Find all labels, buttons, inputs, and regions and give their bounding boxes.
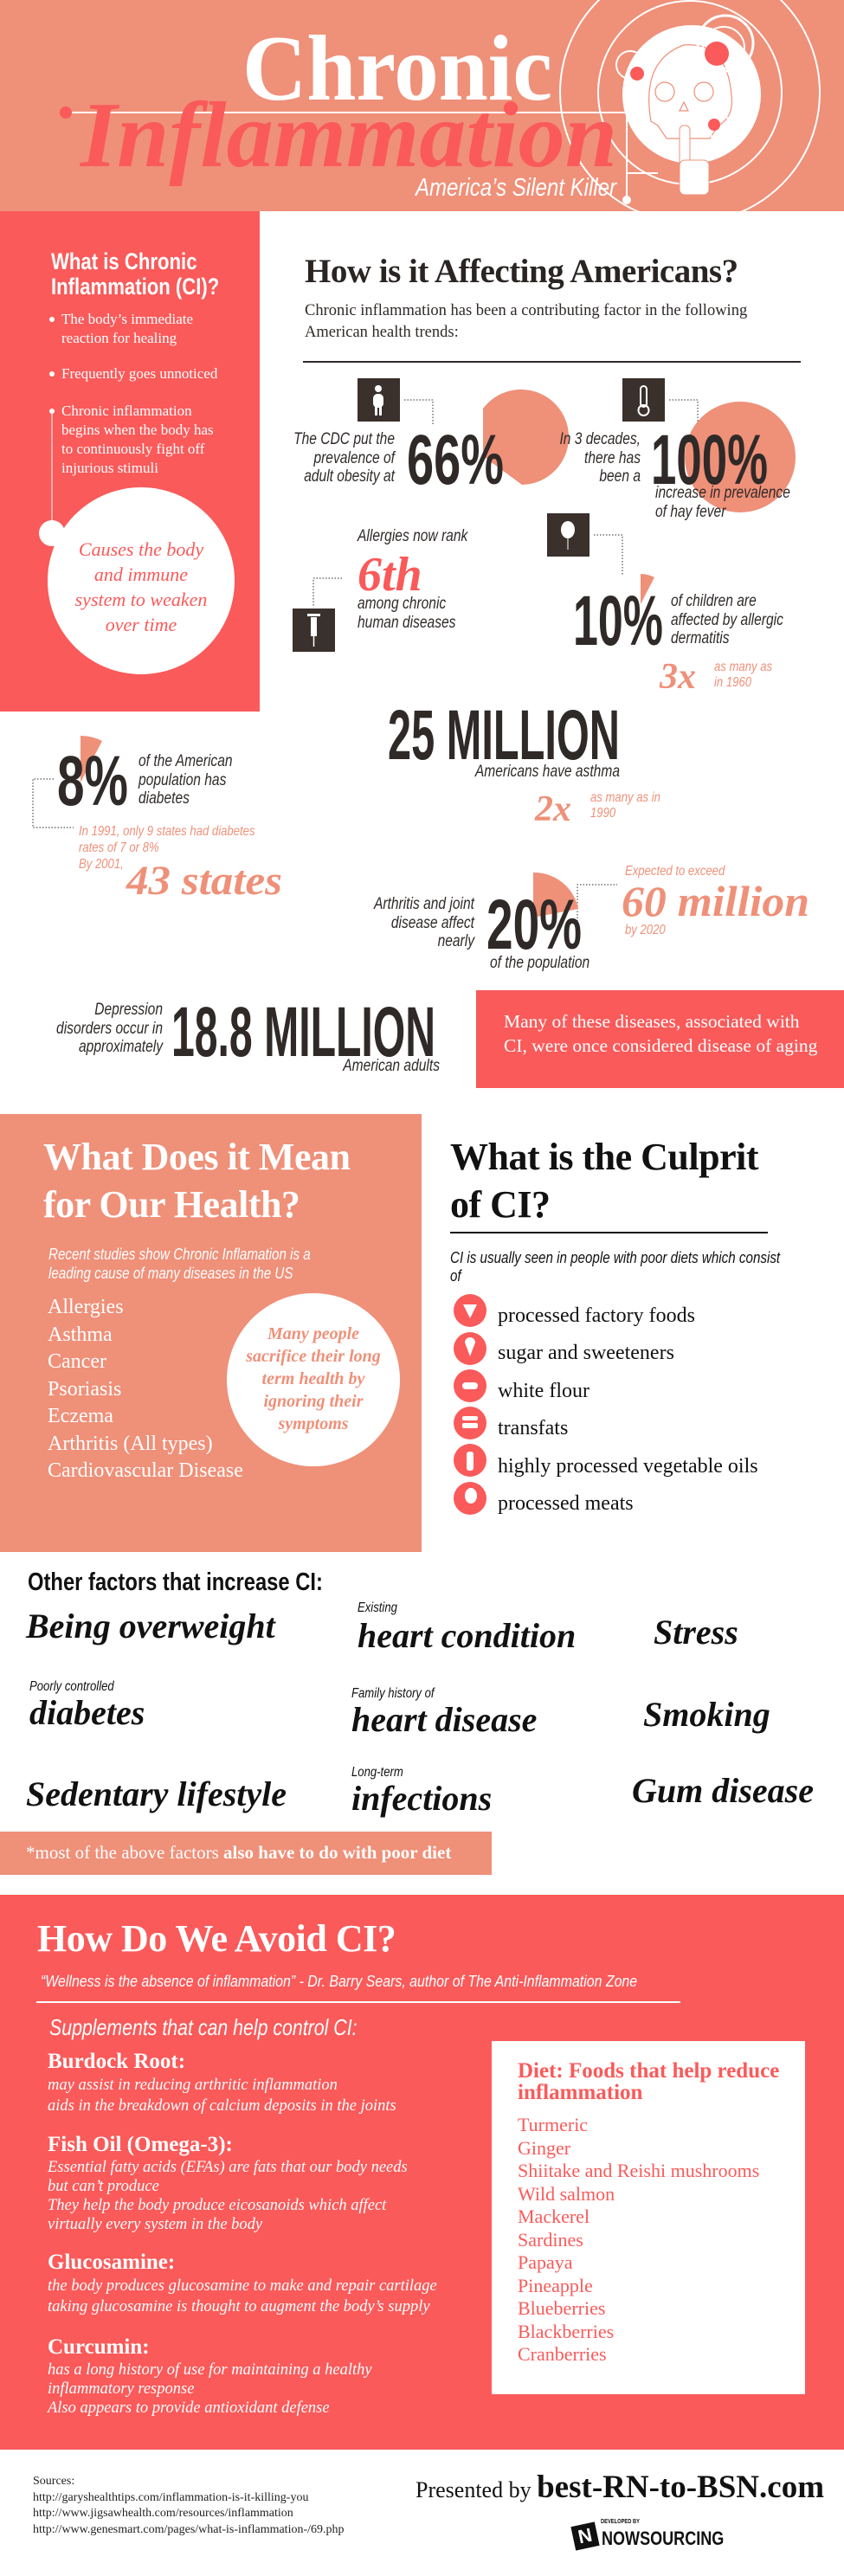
supplements list: but can’t produce	[48, 2178, 159, 2195]
sources: http://www.genesmart.com/pages/what-is-inflammation-/69.php	[33, 2522, 345, 2536]
title: Chronic	[242, 17, 552, 120]
text: approximately	[79, 1038, 163, 1056]
text: of hay fever	[655, 502, 725, 521]
diet box: Shiitake and Reishi mushrooms	[518, 2160, 759, 2181]
heading: of CI?	[450, 1183, 551, 1226]
culprit list	[454, 1294, 758, 1515]
supplements heading: Supplements that can help control CI:	[49, 2014, 358, 2040]
stat: asthma: 25 MILLION	[388, 696, 620, 775]
stat: arthritis 20%: 60 million	[622, 877, 809, 925]
text: disorders occur in	[56, 1020, 163, 1037]
logo: nowsourcing: DEVELOPED BY	[601, 2519, 640, 2525]
stat: arthritis 20%: 20%	[486, 886, 582, 964]
diet box: Cranberries	[518, 2343, 607, 2365]
sources: Sources:	[33, 2475, 74, 2488]
supplements list: taking glucosamine is thought to augment the body’s supply	[48, 2298, 430, 2315]
stat labels: prevalence of	[313, 448, 395, 467]
culprit list: processed meats	[498, 1492, 634, 1515]
text: CI is usually seen in people with poor diets which consist	[450, 1248, 780, 1266]
sources: http://www.jigsawhealth.com/resources/inflammation	[33, 2507, 293, 2520]
disease list: Arthritis (All types)	[48, 1432, 213, 1454]
stat: asthma: 2x	[534, 789, 571, 829]
stat labels	[293, 430, 396, 486]
title: America’s Silent Killer	[414, 174, 617, 202]
diet box: inflammation	[518, 2081, 642, 2104]
callout: over time	[106, 614, 177, 635]
heading: affecting americans: How is it Affecting Americans?	[305, 253, 738, 290]
logo: nowsourcing: NOWSOURCING	[602, 2528, 724, 2549]
callout circle: ignoring their	[263, 1392, 364, 1411]
stat labels: The CDC put the	[293, 430, 395, 448]
callout circle	[227, 1293, 400, 1466]
header	[0, 0, 844, 211]
factors grid: Long-term	[351, 1765, 403, 1780]
diet box: Ginger	[518, 2136, 570, 2159]
text: nearly	[438, 932, 474, 950]
supplements list	[47, 2050, 437, 2417]
logo: nowsourcing	[570, 2519, 724, 2551]
text: rates of 7 or 8%	[79, 840, 159, 855]
factors grid: diabetes	[29, 1693, 145, 1732]
stats chart area	[33, 378, 809, 1072]
text: of children are	[671, 592, 757, 610]
bullets: Frequently goes unnoticed	[61, 365, 217, 382]
text: Allergies now rank	[358, 527, 467, 545]
title: Inflammation	[79, 84, 617, 187]
stat: hay fever 100%: 100%	[651, 421, 768, 499]
stat: dermatitis 10%: 3x	[659, 657, 696, 697]
disease list: Cancer	[48, 1350, 106, 1373]
heading: other factors: Other factors that increase CI:	[28, 1568, 323, 1596]
text: dermatitis	[671, 629, 730, 647]
sources: http://garyshealthtips.com/inflammation-is-it-killing-you	[33, 2491, 308, 2503]
text: diabetes	[139, 789, 190, 808]
icon: skull	[560, 0, 820, 222]
text: of	[450, 1266, 461, 1285]
diet box: Sardines	[518, 2228, 583, 2251]
factors grid: heart disease	[351, 1700, 537, 1739]
disease list	[48, 1296, 243, 1482]
bullets: The body’s immediate	[61, 311, 193, 327]
bullets: begins when the body has	[61, 422, 214, 438]
stat: diabetes 8%	[57, 736, 282, 904]
stat: diabetes 8%: 8%	[57, 742, 128, 821]
presented by: Presented by best-RN-to-BSN.com	[416, 2470, 824, 2505]
sources	[33, 2475, 345, 2536]
stat: hay fever 100%	[622, 378, 796, 512]
title	[79, 17, 617, 202]
text: of the population	[490, 954, 590, 972]
heading: What is the Culprit	[450, 1136, 758, 1178]
text: Expected to exceed	[625, 864, 725, 879]
disease list: Asthma	[48, 1323, 113, 1345]
heading	[43, 1136, 350, 1226]
intro text	[305, 302, 747, 341]
factors grid: Sedentary lifestyle	[26, 1774, 287, 1813]
text: been a	[599, 467, 641, 486]
supplements list: Also appears to provide antioxidant defense	[48, 2399, 330, 2417]
factors grid: heart condition	[358, 1616, 576, 1655]
heading: for Our Health?	[43, 1183, 300, 1226]
disease list: Eczema	[48, 1405, 113, 1427]
supplements list: inflammatory response	[48, 2380, 194, 2398]
stat: arthritis 20%	[486, 873, 809, 964]
disease list: Allergies	[48, 1296, 124, 1318]
heading	[51, 248, 219, 299]
supplements list: has a long history of use for maintaining a healthy	[48, 2361, 372, 2379]
text: as many as	[714, 660, 772, 674]
culprit list: processed factory foods	[498, 1304, 695, 1327]
diet box: Diet: Foods that help reduce	[518, 2059, 779, 2083]
text: population has	[139, 770, 226, 789]
factors grid: Poorly controlled	[29, 1679, 114, 1694]
stat: diabetes 8%: 43 states	[126, 858, 282, 904]
bullets: to continuously fight off	[61, 441, 204, 457]
callout	[74, 538, 207, 635]
note strip	[0, 1832, 492, 1875]
heading: Inflammation (CI)?	[51, 274, 219, 299]
heading: What Does it Mean	[43, 1136, 350, 1178]
callout circle: Many people	[267, 1324, 359, 1343]
supplements list: may assist in reducing arthritic inflammation	[48, 2077, 338, 2094]
factors grid: Stress	[654, 1613, 738, 1652]
subtitle: Recent studies show Chronic Inflamation is a	[48, 1245, 311, 1263]
text: By 2001,	[79, 857, 124, 872]
supplements list: the body produces glucosamine to make and repair cartilage	[48, 2277, 437, 2295]
bullets: Chronic inflammation	[61, 402, 192, 419]
stat: dermatitis 10%	[547, 513, 696, 697]
stat: asthma	[388, 696, 620, 829]
factors grid: Smoking	[643, 1695, 770, 1734]
text: by 2020	[625, 923, 666, 937]
stat: allergies 6th	[293, 548, 422, 652]
factors grid	[26, 1600, 814, 1818]
text: In 3 decades,	[559, 430, 641, 448]
text: in 1960	[714, 675, 751, 690]
text: disease affect	[391, 914, 474, 931]
text: among chronic	[358, 595, 446, 613]
text: as many as in	[590, 790, 660, 805]
supplements list: virtually every system in the body	[48, 2216, 262, 2233]
stat: allergies 6th: 6th	[358, 548, 422, 602]
panel: culprit	[450, 1136, 781, 1515]
heading	[450, 1136, 758, 1226]
text	[450, 1248, 781, 1285]
diet box: Blackberries	[518, 2320, 614, 2342]
intro text: Chronic inflammation has been a contributing factor in the following	[305, 302, 747, 319]
supplements list: Curcumin:	[48, 2335, 150, 2359]
text: there has	[584, 448, 641, 467]
supplements list: Burdock Root:	[48, 2050, 185, 2073]
culprit list: sugar and sweeteners	[498, 1342, 674, 1364]
panel: how do we avoid	[0, 1895, 844, 2450]
callout circle: sacrifice their long	[246, 1347, 381, 1366]
bullets: injurious stimuli	[61, 460, 158, 476]
logo: nowsourcing: N	[577, 2524, 594, 2547]
text: Depression	[94, 1001, 163, 1019]
factors grid: infections	[351, 1779, 492, 1818]
factors grid: Gum disease	[632, 1771, 814, 1810]
text: Americans have asthma	[475, 763, 620, 781]
stat labels: adult obesity at	[304, 467, 395, 486]
factors grid: Existing	[358, 1600, 397, 1615]
note strip: *most of the above factors also have to do with poor diet	[26, 1842, 451, 1863]
supplements list: Fish Oil (Omega-3):	[48, 2133, 233, 2156]
diet box: Mackerel	[518, 2206, 590, 2227]
supplements list: Essential fatty acids (EFAs) are fats that our body needs	[48, 2159, 408, 2176]
culprit list: transfats	[498, 1417, 568, 1439]
callout: and immune	[94, 564, 188, 585]
panel: what does it mean	[0, 1114, 422, 1552]
diet box: Pineapple	[518, 2275, 593, 2296]
text: increase in prevalence	[655, 484, 790, 502]
bullets: reaction for healing	[61, 330, 177, 346]
text: 1990	[590, 806, 615, 821]
callout circle: symptoms	[278, 1414, 349, 1433]
supplements list: aids in the breakdown of calcium deposits in the joints	[48, 2097, 396, 2115]
heading: What is Chronic	[51, 248, 197, 274]
bullets	[61, 311, 218, 476]
callout circle: term health by	[262, 1369, 364, 1388]
factors grid: Family history of	[351, 1686, 435, 1701]
panel: what is CI	[0, 211, 260, 712]
callout: system to weaken	[75, 589, 207, 610]
subtitle	[48, 1245, 311, 1282]
callout: diseases of aging: Many of these diseases, associated with	[504, 1011, 800, 1032]
stat: obesity 66%	[358, 378, 569, 499]
diet box: Wild salmon	[518, 2183, 615, 2204]
callout: Causes the body	[79, 538, 203, 560]
disease list: Cardiovascular Disease	[48, 1459, 243, 1482]
text: In 1991, only 9 states had diabetes	[79, 824, 255, 839]
diet box: Papaya	[518, 2251, 573, 2273]
text: of the American	[139, 752, 233, 770]
text: affected by allergic	[671, 611, 783, 628]
quote: “Wellness is the absence of inflammation” - Dr. Barry Sears, author of The Anti-Inflammation Zone	[41, 1972, 637, 1990]
culprit list: highly processed vegetable oils	[498, 1455, 758, 1478]
stat: depression: 18.8 MILLION	[171, 993, 435, 1072]
disease list: Psoriasis	[48, 1378, 121, 1401]
stat: dermatitis 10%: 10%	[573, 582, 663, 660]
text: Arthritis and joint	[374, 895, 474, 913]
stat: obesity 66%: 66%	[407, 421, 504, 499]
factors grid: Being overweight	[26, 1607, 275, 1645]
diet box: Turmeric	[518, 2114, 588, 2135]
supplements list: They help the body produce eicosanoids which affect	[48, 2197, 386, 2214]
callout: diseases of aging	[476, 990, 844, 1088]
intro text: American health trends:	[305, 324, 459, 341]
culprit list: white flour	[498, 1380, 590, 1402]
diet box: Blueberries	[518, 2297, 605, 2319]
diet box	[492, 2041, 805, 2394]
callout: diseases of aging: CI, were once considered disease of aging	[504, 1035, 817, 1056]
heading: How Do We Avoid CI?	[37, 1917, 396, 1960]
subtitle: leading cause of many diseases in the US	[48, 1264, 293, 1282]
text: human diseases	[358, 613, 455, 632]
supplements list: Glucosamine:	[48, 2251, 175, 2274]
text: American adults	[343, 1057, 440, 1075]
